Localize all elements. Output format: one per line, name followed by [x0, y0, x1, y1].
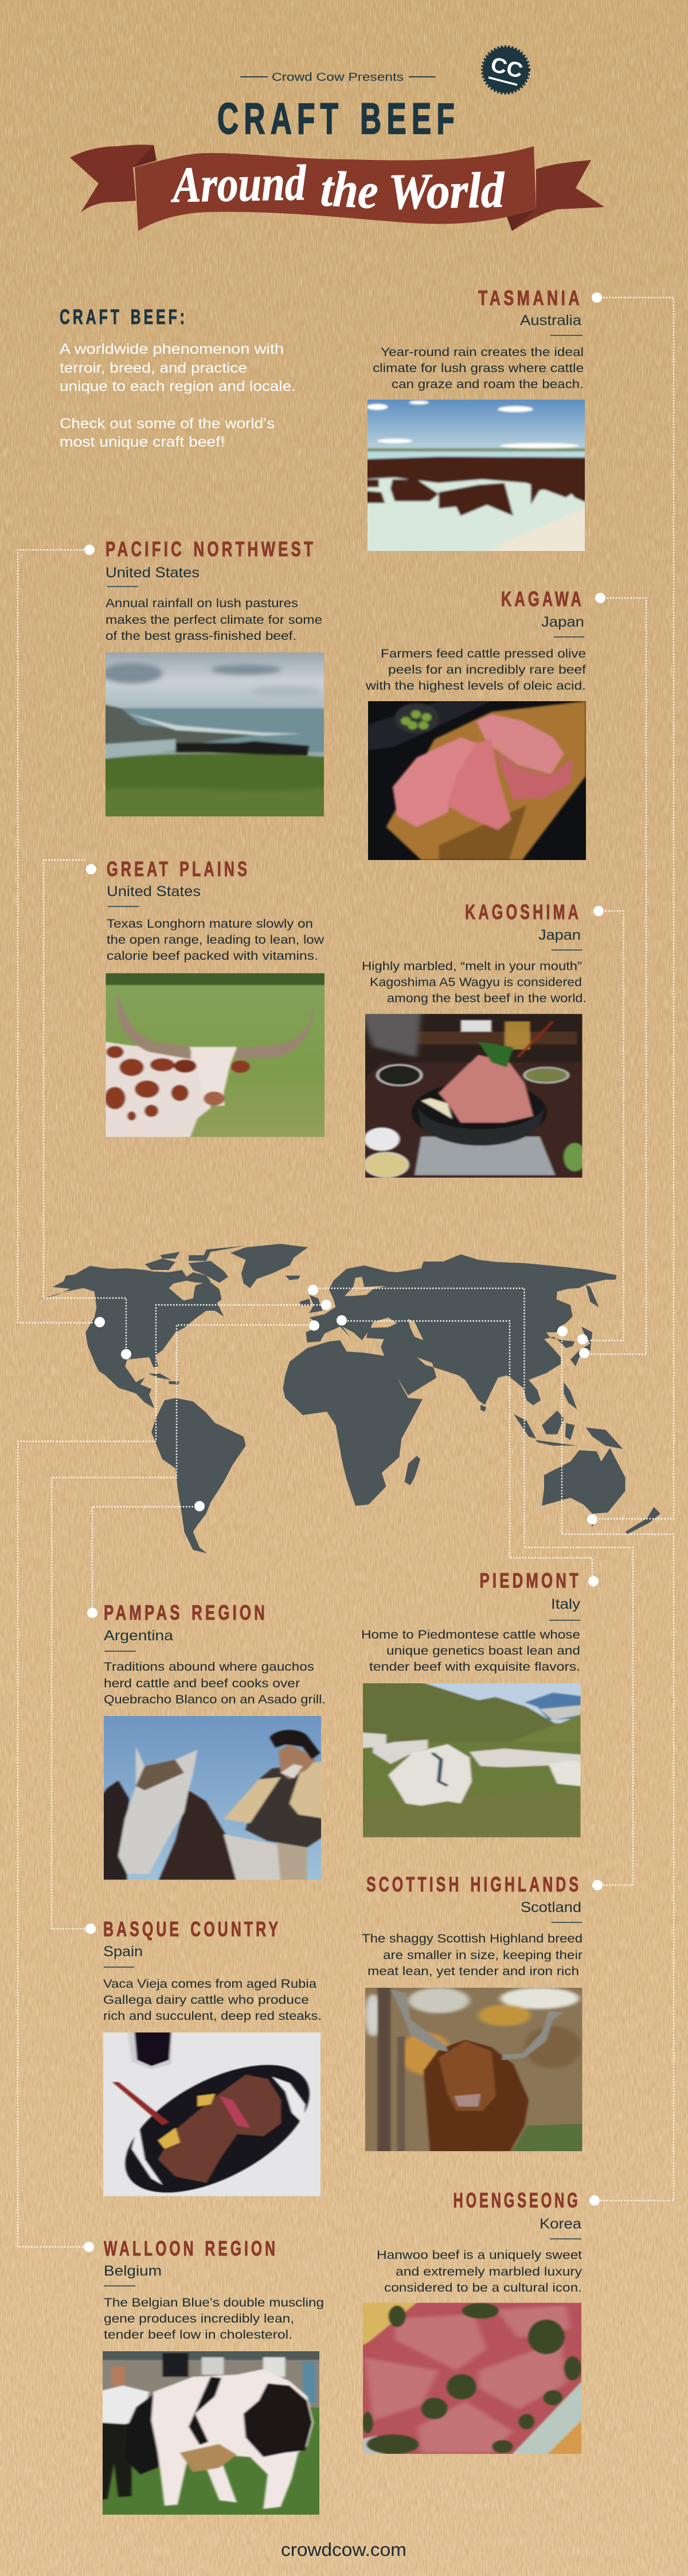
- Australia: [542, 1448, 626, 1527]
- panel: Piedmont: [355, 1569, 588, 1841]
- panel: Tasmania: Year-round rain creates the ideal: [381, 346, 584, 359]
- presenter line: Crowd Cow Presents: [272, 71, 404, 84]
- panel: Kagawa: peels for an incredibly rare beef: [388, 663, 586, 677]
- New Zealand: [626, 1507, 660, 1534]
- panel: Kagoshima: Japan: [538, 927, 581, 943]
- region label dots: [84, 292, 605, 2252]
- Africa: [283, 1340, 423, 1506]
- Greenland: [230, 1244, 308, 1288]
- panel: Hoengseong: HOENGSEONG: [453, 2188, 580, 2212]
- panel: Hoengseong: considered to be a cultural icon.: [384, 2281, 582, 2294]
- panel: Kagawa: Japan: [541, 614, 584, 630]
- panel: Kagawa: with the highest levels of oleic acid.: [365, 679, 586, 693]
- panel: Basque Country: rich and succulent, deep red steaks.: [103, 2010, 322, 2023]
- panel: Kagawa: KAGAWA: [501, 587, 584, 611]
- photo: Belgian Blue bull: [103, 2351, 319, 2515]
- panel: Walloon Region: The Belgian Blue’s double muscling: [104, 2296, 324, 2309]
- panel: Great Plains: GREAT PLAINS: [107, 857, 250, 881]
- Arctic islands: [145, 1246, 300, 1283]
- panel: Pacific Northwest: [97, 537, 334, 823]
- intro block: Check out some of the world’s: [60, 416, 275, 432]
- photo: marbled steaks: [368, 701, 586, 860]
- Britain and Ireland: [300, 1295, 322, 1313]
- ribbon text: Around: [170, 155, 307, 213]
- Caribbean: [148, 1374, 180, 1385]
- map location dots: [95, 1285, 597, 1525]
- Eurasia: [306, 1254, 616, 1405]
- panel: Kagawa: [365, 587, 586, 860]
- intro block: CRAFT BEEF:: [60, 305, 187, 329]
- photo: cattle on beach: [368, 400, 585, 551]
- photo: Highland cow: [365, 1988, 583, 2151]
- panel: Pampas Region: [99, 1601, 327, 1882]
- panel: Walloon Region: tender beef low in cholesterol.: [104, 2328, 292, 2342]
- title: CRAFT BEEF: [217, 95, 460, 143]
- panel: Kagoshima: among the best beef in the world.: [387, 992, 587, 1005]
- panel: Basque Country: Gallega dairy cattle who produce: [103, 1993, 309, 2007]
- photo: sukiyaki pot: [365, 1014, 583, 1178]
- intro block: A worldwide phenomenon with: [60, 341, 284, 357]
- panel: Pacific Northwest: PACIFIC NORTHWEST: [105, 537, 316, 561]
- ribbon text: World: [388, 162, 506, 220]
- panel: Scottish Highlands: [362, 1873, 588, 2153]
- panel: Pampas Region: Traditions abound where gauchos: [104, 1660, 314, 1674]
- logo badge: [483, 47, 529, 93]
- panel: Scottish Highlands: SCOTTISH HIGHLANDS: [366, 1873, 581, 1896]
- panel: Walloon Region: Belgium: [104, 2263, 162, 2279]
- intro block: unique to each region and locale.: [60, 378, 296, 394]
- panel: Kagawa: Farmers feed cattle pressed olive: [381, 647, 586, 660]
- connector lines: [18, 298, 674, 2247]
- ribbon banner: [70, 144, 604, 231]
- panel: Scottish Highlands: The shaggy Scottish Highland breed: [362, 1932, 583, 1945]
- photo: steak in a pan: [103, 2032, 320, 2196]
- panel: Kagoshima: [360, 900, 588, 1180]
- panel: Tasmania: TASMANIA: [478, 286, 583, 310]
- panel: Scottish Highlands: are smaller in size, keeping their: [383, 1949, 583, 1962]
- panel: Kagoshima: Kagoshima A5 Wagyu is considered: [370, 976, 582, 989]
- panel: Kagoshima: KAGOSHIMA: [465, 900, 581, 924]
- panel: Tasmania: climate for lush grass where cattle: [373, 362, 584, 375]
- panel: Basque Country: Vaca Vieja comes from aged Rubia: [103, 1977, 316, 1991]
- intro block: terroir, breed, and practice: [60, 360, 247, 376]
- photo: Hanwoo beef tray: [363, 2303, 581, 2454]
- panel: Piedmont: unique genetics boast lean and: [386, 1644, 580, 1658]
- panel: Great Plains: [96, 857, 333, 1142]
- panel: Great Plains: calorie beef packed with vitamins.: [107, 949, 318, 963]
- panel: Pampas Region: PAMPAS REGION: [104, 1601, 268, 1624]
- photo: coast pasture: [105, 652, 324, 816]
- South America: [151, 1398, 246, 1553]
- panel: Hoengseong: [355, 2188, 588, 2457]
- panel: Basque Country: BASQUE COUNTRY: [103, 1917, 281, 1941]
- panel: Pacific Northwest: United States: [105, 565, 200, 581]
- intro block: most unique craft beef!: [60, 434, 225, 450]
- ribbon text: the: [319, 161, 380, 220]
- panel: Hoengseong: and extremely marbled luxury: [396, 2265, 583, 2278]
- panel: Scottish Highlands: Scotland: [521, 1899, 581, 1916]
- panel: Walloon Region: [94, 2237, 327, 2515]
- panel: Pampas Region: Quebracho Blanco on an Asado grill.: [104, 1693, 326, 1706]
- intro block: [60, 305, 296, 450]
- Asian islands: [480, 1285, 623, 1449]
- panel: Hoengseong: Korea: [540, 2216, 581, 2232]
- logo badge: CC: [488, 53, 525, 83]
- panel: Piedmont: Home to Piedmontese cattle whose: [361, 1628, 580, 1641]
- panel: Basque Country: [87, 1917, 347, 2206]
- panel: Tasmania: can graze and roam the beach.: [392, 378, 584, 391]
- panel: Walloon Region: gene produces incredibly lean,: [104, 2312, 294, 2325]
- panel: Piedmont: Italy: [551, 1596, 581, 1612]
- panel: Piedmont: tender beef with exquisite flavors.: [369, 1660, 580, 1674]
- panel: Kagoshima: Highly marbled, “melt in your mouth”: [362, 960, 582, 973]
- ribbon text: [170, 155, 506, 220]
- photo: white cattle in the Alps: [363, 1683, 580, 1837]
- panel: Tasmania: [359, 286, 592, 556]
- panel: Basque Country: Spain: [103, 1944, 143, 1960]
- panel: Pampas Region: Argentina: [104, 1628, 173, 1644]
- panel: Pampas Region: herd cattle and beef cooks over: [104, 1677, 300, 1690]
- panel: Piedmont: PIEDMONT: [479, 1569, 581, 1592]
- Madagascar: [405, 1456, 420, 1486]
- panel: Great Plains: Texas Longhorn mature slowly on: [107, 917, 313, 931]
- world map: [38, 1244, 660, 1554]
- panel: Great Plains: United States: [107, 884, 201, 900]
- photo: Texas longhorn: [105, 974, 325, 1137]
- panel: Hoengseong: Hanwoo beef is a uniquely sweet: [377, 2249, 582, 2262]
- panel: Scottish Highlands: meat lean, yet tender and iron rich: [368, 1965, 579, 1978]
- panel: Pacific Northwest: Annual rainfall on lush pastures: [105, 597, 298, 610]
- panel: Tasmania: Australia: [520, 312, 581, 329]
- panel: Walloon Region: WALLOON REGION: [104, 2237, 278, 2260]
- North America: [37, 1266, 224, 1408]
- footer url: crowdcow.com: [281, 2539, 406, 2560]
- panel: Great Plains: the open range, leading to lean, low: [107, 933, 325, 947]
- panel: Pacific Northwest: of the best grass-finished beef.: [105, 630, 296, 643]
- panel: Pacific Northwest: makes the perfect climate for some: [105, 613, 322, 627]
- photo: gaucho and horse: [104, 1716, 321, 1879]
